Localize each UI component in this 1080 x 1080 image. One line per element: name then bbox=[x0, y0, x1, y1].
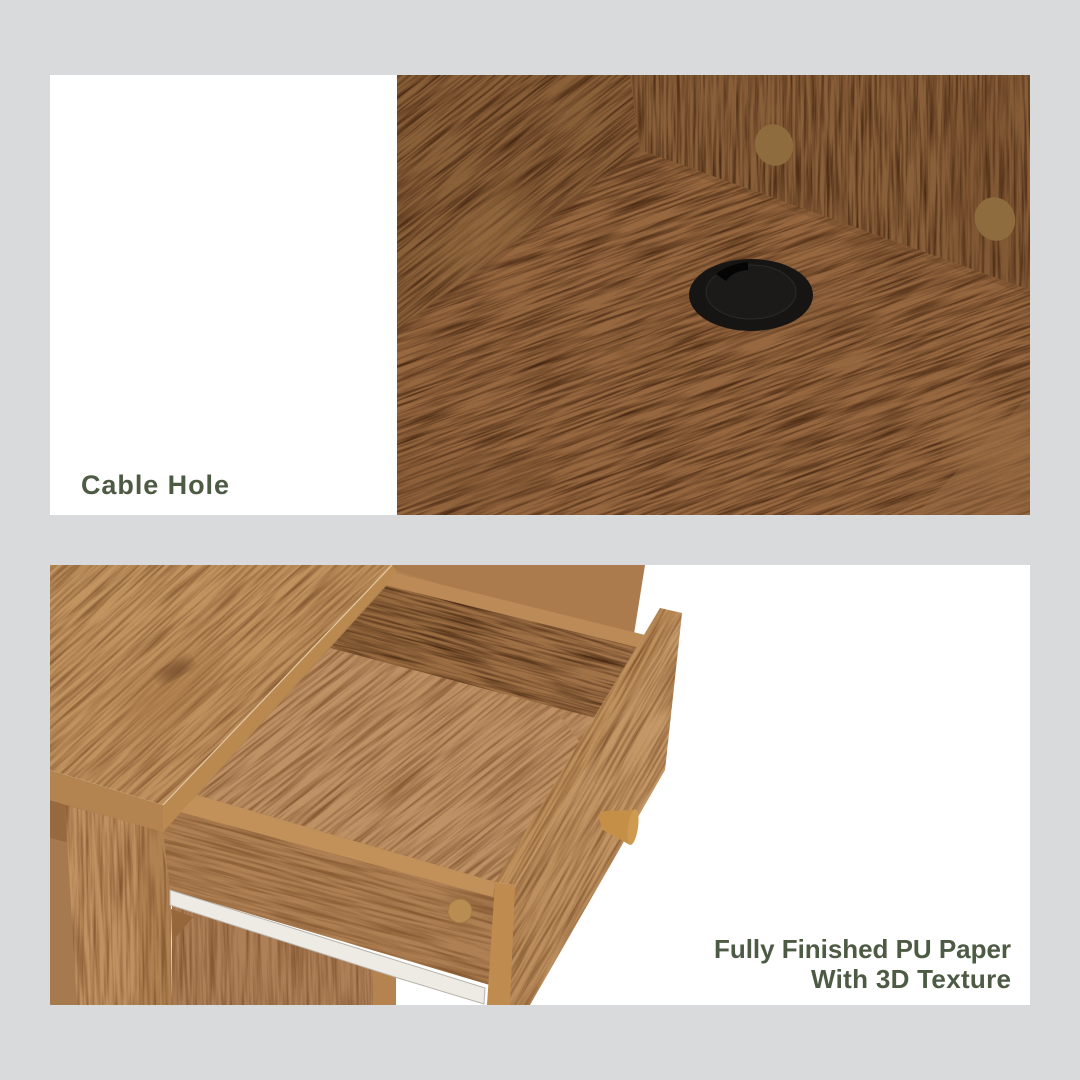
drawer front top edge bbox=[495, 608, 682, 885]
leg bbox=[65, 805, 172, 1005]
photo: open drawer bbox=[50, 565, 682, 1005]
drawer back top rim bbox=[385, 573, 645, 648]
left lower panel bbox=[50, 800, 172, 1005]
drawer floor bbox=[197, 648, 595, 882]
drawer side panel bbox=[163, 795, 495, 985]
icon: screw cap 1 bbox=[754, 124, 793, 166]
drawer front end strip bbox=[487, 882, 515, 1005]
panel: PU paper texture bbox=[50, 565, 1030, 1005]
desktop front edge bbox=[50, 770, 163, 832]
heading: PU paper: Fully Finished PU Paper bbox=[714, 934, 1011, 964]
heading: PU paper bbox=[714, 934, 1011, 994]
caption card: cable hole bbox=[50, 75, 397, 515]
icon: black cable grommet bbox=[689, 259, 813, 331]
icon: drawer dowel cap bbox=[448, 899, 472, 923]
drawer underlay bbox=[160, 570, 642, 985]
left wall bbox=[397, 75, 640, 330]
drawer side rim bbox=[180, 795, 495, 897]
cabinet shadow notch bbox=[171, 909, 193, 942]
icon: conical drawer knob bbox=[598, 808, 640, 846]
left corner shadow bbox=[397, 150, 640, 337]
lower right panel edge bbox=[915, 395, 1030, 515]
desktop surface bbox=[50, 565, 392, 805]
lower cabinet panel bbox=[172, 905, 395, 1005]
photo: cabinet interior with cable grommet bbox=[370, 75, 1030, 515]
rear cabinet side bbox=[392, 565, 645, 634]
band under desktop bbox=[50, 800, 67, 842]
heading: PU paper: With 3D Texture bbox=[811, 964, 1011, 994]
desktop side edge bbox=[163, 565, 397, 832]
drawer back panel bbox=[330, 584, 640, 718]
icon: screw cap 2 bbox=[974, 197, 1016, 241]
white drawer slide bbox=[170, 890, 485, 1004]
panel: cable hole bbox=[50, 75, 1030, 515]
infographic canvas bbox=[50, 75, 1030, 1005]
drawer front panel bbox=[505, 613, 682, 1005]
desktop edge highlight bbox=[163, 565, 392, 805]
right corner shadow bbox=[640, 150, 1030, 296]
floor bbox=[370, 150, 1030, 515]
heading: cable hole: Cable Hole bbox=[81, 470, 229, 500]
caption card: PU paper bbox=[50, 565, 1030, 1005]
right wall bbox=[630, 75, 1030, 290]
cabinet slim post bbox=[373, 972, 396, 1005]
